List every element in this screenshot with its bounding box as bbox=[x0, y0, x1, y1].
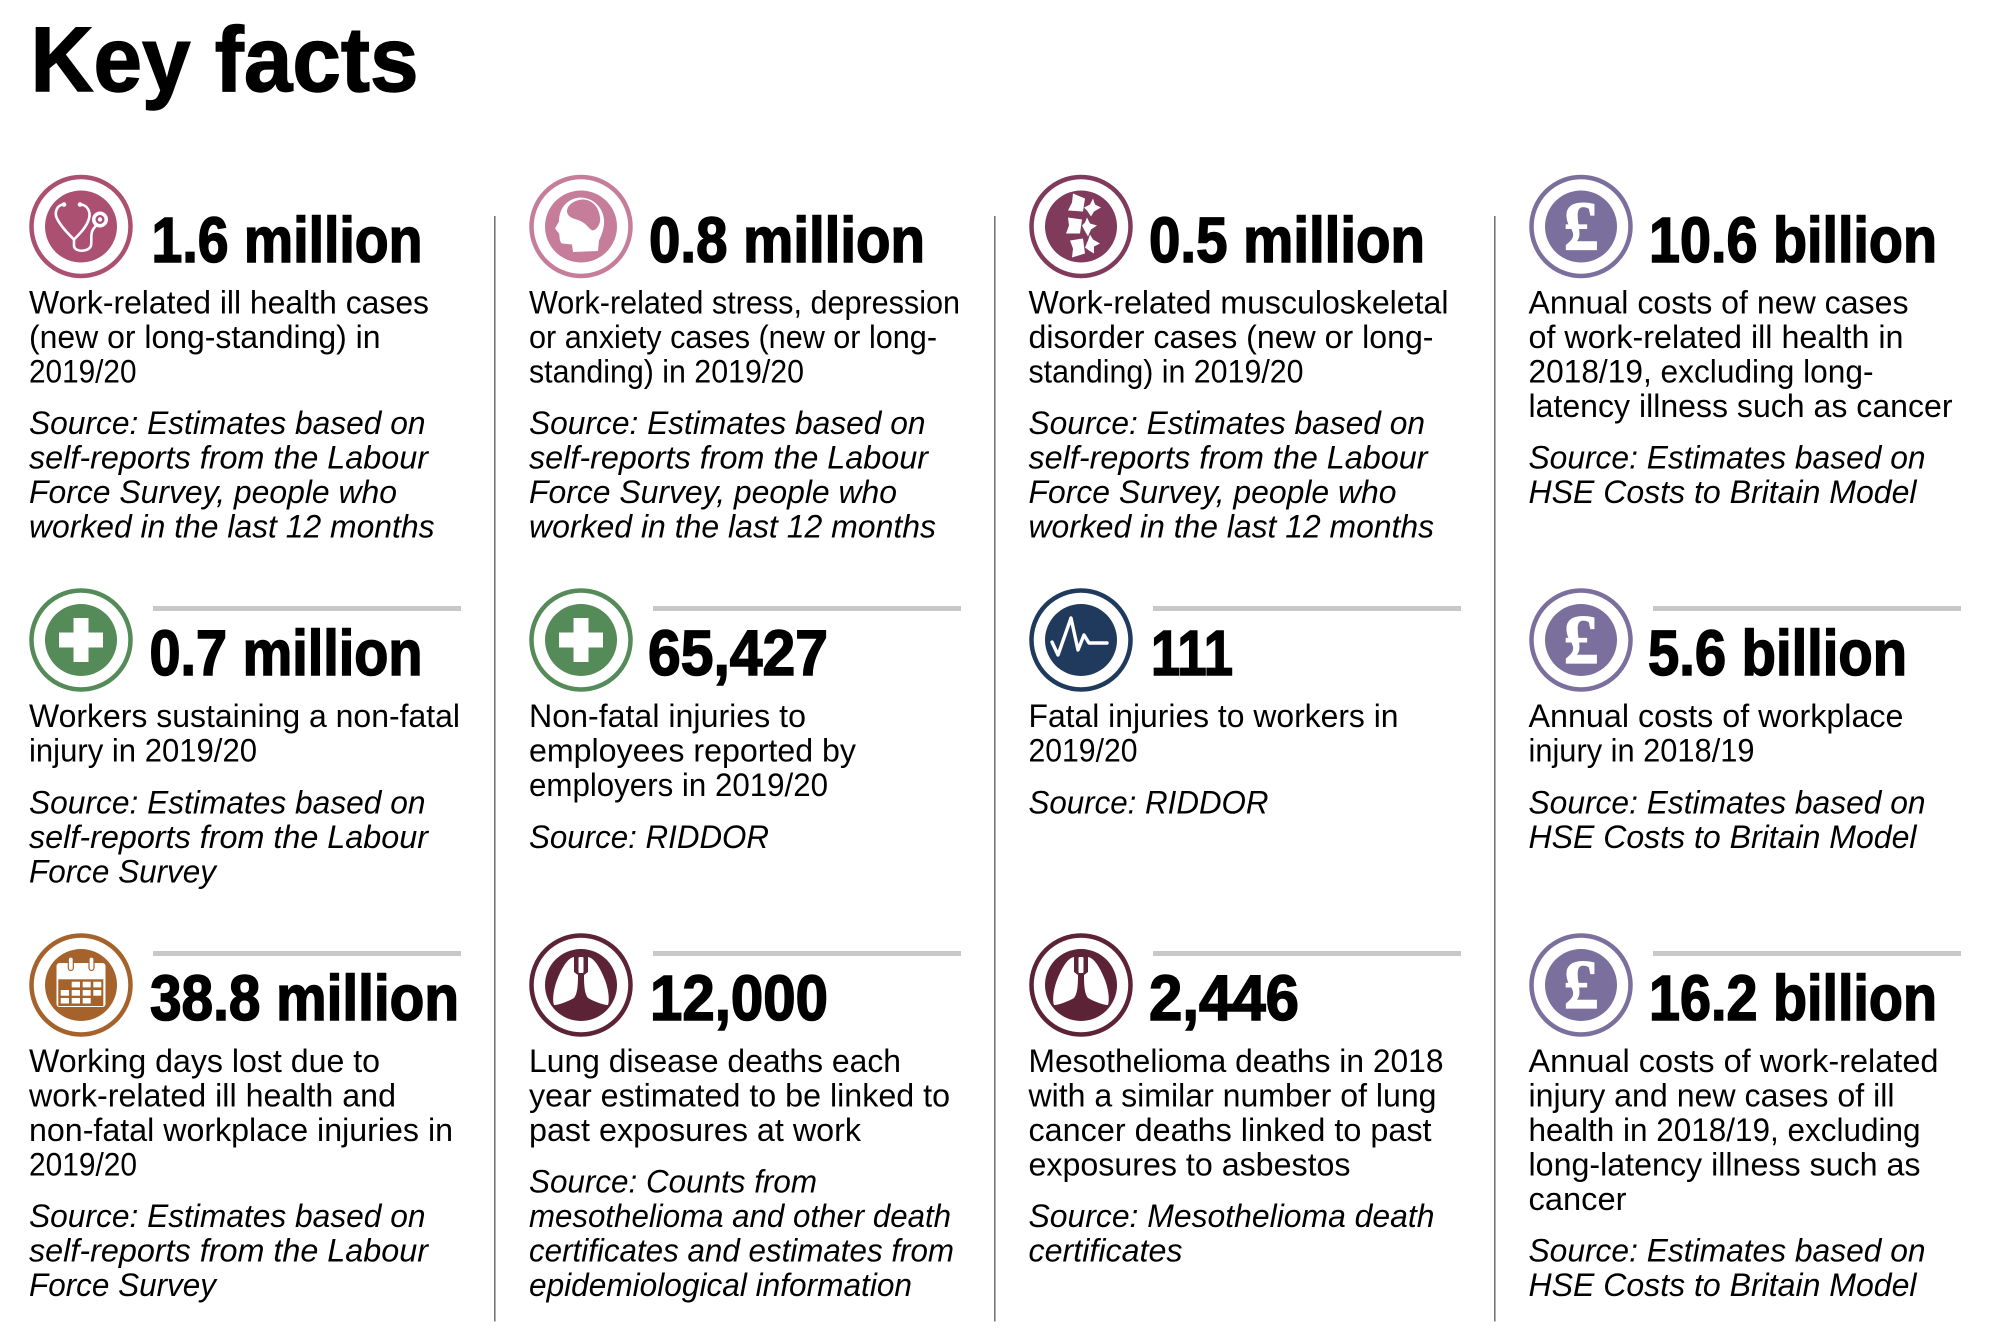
source: Source: Estimates based on bbox=[29, 1198, 426, 1234]
icon: lungs bbox=[1032, 936, 1130, 1034]
source: HSE Costs to Britain Model bbox=[1528, 819, 1917, 855]
icon: pound sign: £ bbox=[1564, 947, 1598, 1024]
figure: 1.6 million bbox=[152, 204, 422, 276]
icon: pulse bbox=[1032, 590, 1130, 690]
source: Force Survey, people who bbox=[29, 474, 397, 510]
description: cancer deaths linked to past bbox=[1028, 1112, 1432, 1148]
description: work-related ill health and bbox=[28, 1078, 396, 1114]
source: self-reports from the Labour bbox=[29, 1232, 429, 1268]
source: HSE Costs to Britain Model bbox=[1528, 1267, 1917, 1303]
source: self-reports from the Labour bbox=[1028, 440, 1429, 476]
description bbox=[29, 284, 429, 390]
icon: pound sign bbox=[1532, 590, 1630, 690]
source bbox=[29, 784, 429, 890]
figure: 5.6 billion bbox=[1648, 617, 1907, 689]
description bbox=[29, 698, 460, 768]
figure: 12,000 bbox=[650, 962, 828, 1034]
source bbox=[1028, 405, 1434, 544]
description bbox=[1528, 698, 1904, 768]
figure: 0.5 million bbox=[1149, 204, 1425, 276]
figure: 0.7 million bbox=[150, 617, 422, 689]
panel: 0.7 million non-fatal injuries bbox=[29, 590, 460, 890]
source: worked in the last 12 months bbox=[529, 508, 936, 544]
panel: 10.6 billion costs of ill health bbox=[1528, 177, 1953, 510]
figure: 16.2 billion bbox=[1649, 962, 1937, 1034]
description bbox=[1528, 1043, 1938, 1217]
description: Working days lost due to bbox=[29, 1043, 380, 1079]
description: non-fatal workplace injuries in bbox=[29, 1112, 453, 1148]
description: Work-related stress, depression bbox=[529, 284, 960, 320]
description: disorder cases (new or long- bbox=[1028, 319, 1434, 355]
source: Source: Estimates based on bbox=[529, 405, 926, 441]
description: Non-fatal injuries to bbox=[529, 698, 806, 734]
description bbox=[1528, 284, 1953, 424]
source: Source: Estimates based on bbox=[1528, 1232, 1926, 1268]
description: 2019/20 bbox=[29, 354, 136, 390]
source bbox=[29, 1198, 429, 1303]
source: certificates and estimates from bbox=[529, 1232, 954, 1268]
description: exposures to asbestos bbox=[1028, 1146, 1350, 1182]
description: standing) in 2019/20 bbox=[529, 354, 804, 390]
source bbox=[529, 1164, 954, 1303]
source: Source: Estimates based on bbox=[29, 405, 426, 441]
source: epidemiological information bbox=[529, 1267, 912, 1303]
icon: pound sign: £ bbox=[1564, 188, 1598, 266]
panel: 65,427 reported injuries bbox=[529, 590, 856, 855]
description: standing) in 2019/20 bbox=[1028, 354, 1304, 390]
description bbox=[1028, 284, 1448, 390]
source: worked in the last 12 months bbox=[29, 508, 434, 544]
source: Force Survey bbox=[29, 1267, 218, 1303]
panel: 0.5 million musculoskeletal cases bbox=[1028, 177, 1448, 544]
description bbox=[28, 1043, 453, 1182]
source: Force Survey, people who bbox=[1028, 474, 1396, 510]
source: Source: Mesothelioma death bbox=[1028, 1198, 1434, 1234]
description bbox=[529, 1043, 950, 1148]
panel: 16.2 billion total costs bbox=[1528, 936, 1938, 1303]
description: Fatal injuries to workers in bbox=[1028, 698, 1398, 734]
icon: medical cross bbox=[532, 590, 630, 690]
description bbox=[1028, 698, 1398, 768]
source: Force Survey, people who bbox=[529, 474, 897, 510]
icon: calendar bbox=[32, 936, 130, 1034]
description: 2018/19, excluding long- bbox=[1528, 354, 1874, 390]
description: latency illness such as cancer bbox=[1528, 388, 1953, 424]
icon: stethoscope bbox=[32, 177, 130, 276]
description: 2019/20 bbox=[1028, 732, 1138, 768]
panel: 38.8 million working days lost bbox=[28, 936, 459, 1303]
description: health in 2018/19, excluding bbox=[1528, 1112, 1920, 1148]
source bbox=[1528, 1232, 1926, 1303]
description: (new or long-standing) in bbox=[29, 319, 380, 355]
source: Source: Estimates based on bbox=[1528, 440, 1926, 476]
source: mesothelioma and other death bbox=[529, 1198, 951, 1234]
source: self-reports from the Labour bbox=[529, 440, 929, 476]
source: Source: Estimates based on bbox=[29, 784, 426, 820]
panel: 5.6 billion injury costs bbox=[1528, 590, 1926, 855]
icon: lungs bbox=[532, 936, 630, 1034]
icon: pound sign: £ bbox=[1564, 602, 1598, 679]
description: Work-related ill health cases bbox=[29, 284, 429, 320]
description: Annual costs of new cases bbox=[1528, 284, 1908, 320]
source bbox=[1528, 784, 1926, 855]
description: of work-related ill health in bbox=[1528, 319, 1904, 355]
source bbox=[1028, 1198, 1434, 1268]
icon: head and brain bbox=[532, 177, 630, 276]
description: year estimated to be linked to bbox=[529, 1078, 950, 1114]
description: cancer bbox=[1528, 1181, 1627, 1217]
description: with a similar number of lung bbox=[1027, 1078, 1436, 1114]
description: Annual costs of work-related bbox=[1528, 1043, 1938, 1079]
source: self-reports from the Labour bbox=[29, 440, 429, 476]
description: or anxiety cases (new or long- bbox=[529, 319, 937, 355]
description: Work-related musculoskeletal bbox=[1028, 284, 1448, 320]
panel: 12,000 lung disease deaths bbox=[529, 936, 954, 1303]
description: 2019/20 bbox=[29, 1146, 137, 1182]
description: past exposures at work bbox=[529, 1112, 862, 1148]
source bbox=[1528, 440, 1926, 510]
panel: 111 fatal injuries bbox=[1028, 590, 1398, 820]
source: Source: RIDDOR bbox=[529, 819, 769, 855]
figure: 38.8 million bbox=[150, 962, 459, 1034]
icon: medical cross bbox=[32, 590, 130, 690]
icon: pound sign bbox=[1532, 177, 1630, 276]
figure: 2,446 bbox=[1149, 962, 1299, 1034]
figure: 0.8 million bbox=[649, 204, 925, 276]
panel: 1.6 million ill health cases bbox=[29, 177, 434, 544]
icon: spine bbox=[1032, 177, 1130, 276]
source: worked in the last 12 months bbox=[1028, 508, 1434, 544]
description: long-latency illness such as bbox=[1528, 1146, 1920, 1182]
source: Source: RIDDOR bbox=[1028, 784, 1268, 820]
source: self-reports from the Labour bbox=[29, 819, 429, 855]
description: employers in 2019/20 bbox=[529, 767, 828, 803]
description bbox=[1027, 1043, 1444, 1182]
title: Key facts bbox=[30, 9, 418, 111]
source: Source: Counts from bbox=[529, 1164, 817, 1200]
description: employees reported by bbox=[529, 732, 856, 768]
description: injury in 2019/20 bbox=[29, 732, 257, 768]
description: Lung disease deaths each bbox=[529, 1043, 901, 1079]
description: injury in 2018/19 bbox=[1528, 732, 1754, 768]
source bbox=[29, 405, 434, 544]
panel: 2,446 mesothelioma deaths bbox=[1027, 936, 1444, 1268]
figure: 10.6 billion bbox=[1649, 204, 1937, 276]
description: Workers sustaining a non-fatal bbox=[29, 698, 460, 734]
source: Source: Estimates based on bbox=[1528, 784, 1926, 820]
description bbox=[529, 698, 856, 803]
panel: 0.8 million stress cases bbox=[529, 177, 960, 544]
figure: 111 bbox=[1151, 617, 1233, 689]
description: Mesothelioma deaths in 2018 bbox=[1028, 1043, 1444, 1079]
source: certificates bbox=[1028, 1232, 1182, 1268]
source: HSE Costs to Britain Model bbox=[1528, 474, 1917, 510]
source bbox=[529, 405, 936, 544]
description bbox=[529, 284, 960, 390]
source: Source: Estimates based on bbox=[1028, 405, 1425, 441]
description: injury and new cases of ill bbox=[1528, 1078, 1894, 1114]
figure: 65,427 bbox=[648, 617, 828, 689]
source: Force Survey bbox=[29, 854, 218, 890]
description: Annual costs of workplace bbox=[1528, 698, 1904, 734]
icon: pound sign bbox=[1532, 936, 1630, 1034]
